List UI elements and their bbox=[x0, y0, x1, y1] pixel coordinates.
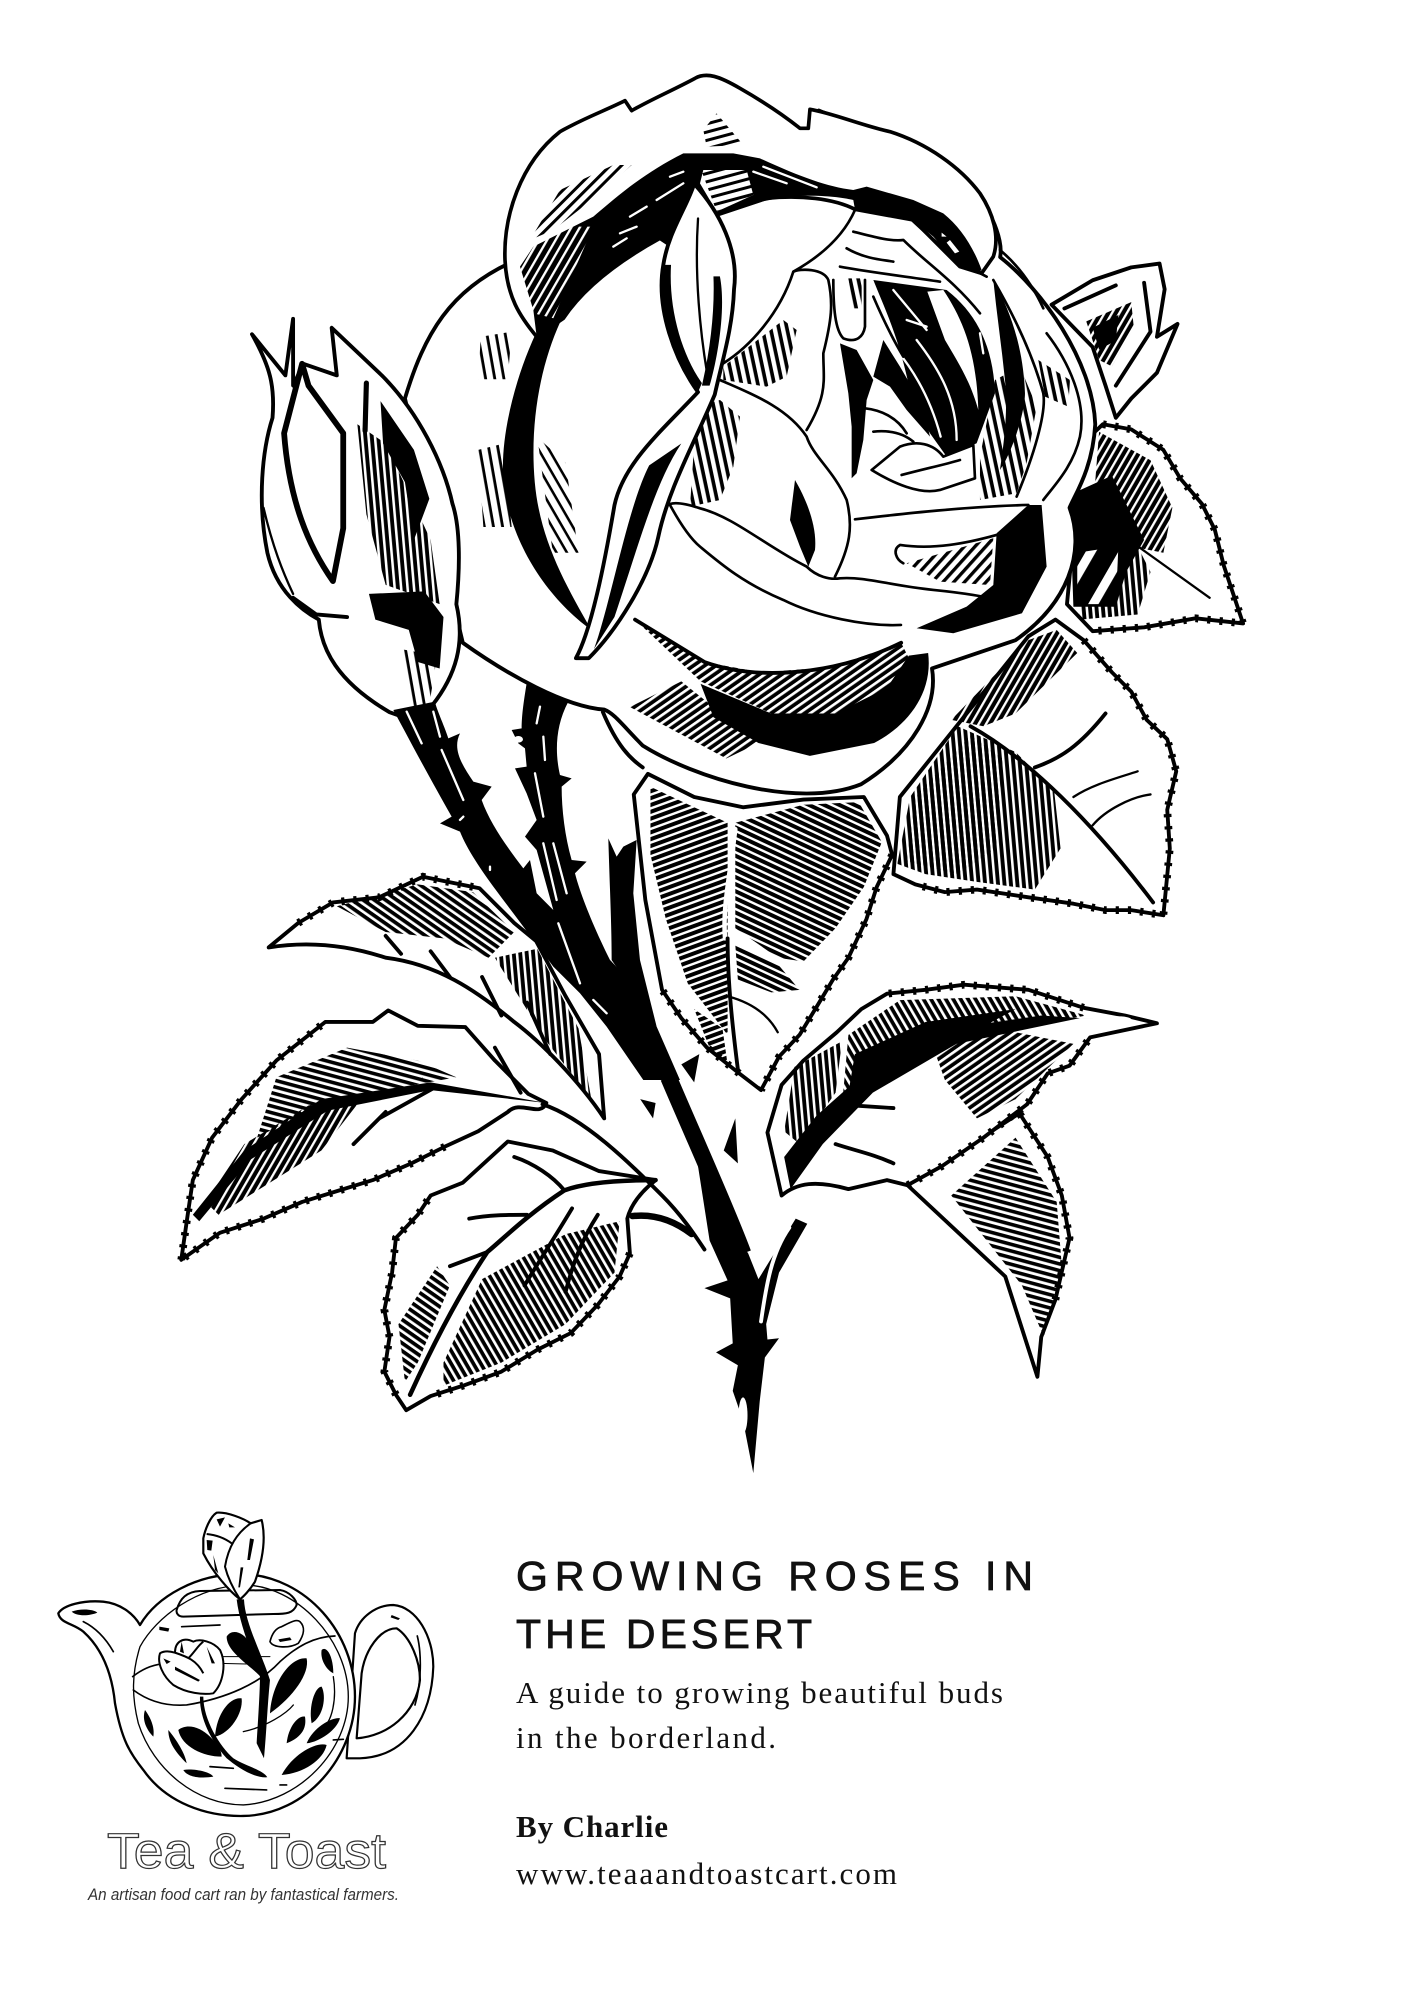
logo tagline: An artisan food cart ran by fantastical farmers. bbox=[87, 1885, 399, 1904]
leaf: left upper bbox=[269, 877, 604, 1118]
rose: inner petals and swirl bbox=[670, 210, 1081, 633]
rose: central long sepal bbox=[576, 184, 735, 658]
stems and thorns bbox=[393, 683, 807, 1473]
logo: plant stem and leaves bbox=[144, 1599, 340, 1778]
logo wordmark: Tea & Toast: Tea & Toast bbox=[107, 1823, 386, 1879]
title: GROWING ROSES IN bbox=[516, 1553, 1033, 1599]
leaf: upper right, behind rose bbox=[1067, 424, 1243, 631]
illustration: rose with bud, stems and leaves bbox=[181, 75, 1243, 1473]
rose bud: left bbox=[252, 319, 460, 720]
logo: Tea & Toast teapot bbox=[58, 1513, 433, 1816]
rose: lower petal dark band bbox=[603, 620, 929, 767]
teapot handle bbox=[347, 1605, 433, 1758]
website: www.teaaandtoastcart.com bbox=[516, 1856, 897, 1891]
author: By Charlie bbox=[516, 1809, 668, 1844]
subtitle: A guide to growing beautiful buds bbox=[516, 1675, 1003, 1710]
teapot body and spout bbox=[58, 1574, 355, 1816]
subtitle bbox=[516, 1675, 1003, 1755]
title bbox=[516, 1553, 1033, 1657]
rose interior: right petal edges bbox=[980, 367, 1037, 500]
leaf: left middle bbox=[181, 1010, 546, 1260]
rose interior: dark throat bbox=[873, 280, 995, 457]
leaf: left lower bbox=[384, 1142, 656, 1410]
leaf: center large bbox=[634, 774, 892, 1090]
rose: left crescent shadow bbox=[478, 318, 591, 630]
title: THE DESERT bbox=[516, 1611, 812, 1657]
leaves behind and below the bloom bbox=[181, 77, 1243, 1410]
leaf: right lower bbox=[767, 985, 1157, 1377]
leaf: large right bbox=[893, 620, 1176, 915]
teapot lid bbox=[177, 1590, 297, 1617]
logo: rose in bowl bbox=[159, 1621, 304, 1694]
teapot small marks bbox=[72, 1609, 400, 1632]
logo: rose bud on top bbox=[203, 1513, 264, 1599]
rose: top petal with dark fold bbox=[505, 75, 996, 337]
rose interior: top folds bbox=[853, 232, 980, 313]
small bud: upper right bbox=[1052, 264, 1178, 418]
rose head outer silhouette bbox=[405, 77, 1095, 793]
subtitle: in the borderland. bbox=[516, 1720, 776, 1755]
teapot inner glass and water bbox=[133, 1585, 348, 1805]
